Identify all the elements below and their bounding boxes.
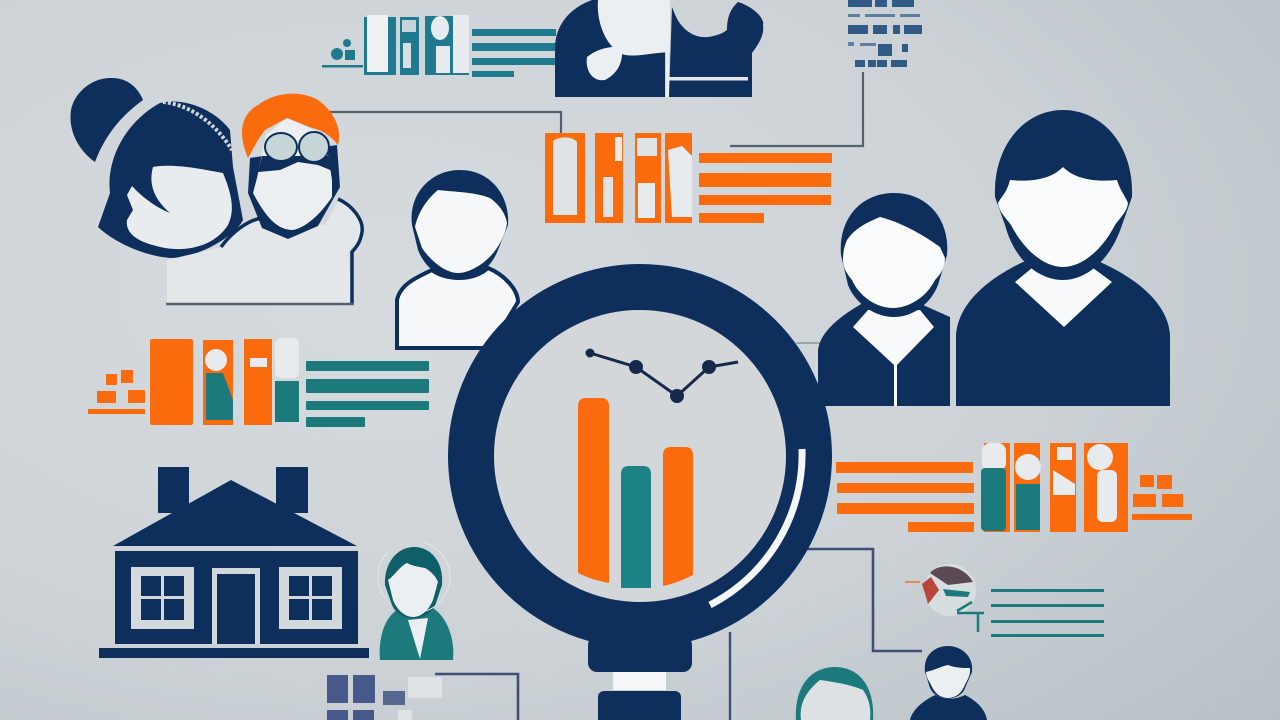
middle person collar	[853, 310, 934, 406]
middle person face	[843, 217, 945, 308]
handle collar	[588, 636, 692, 672]
glasses bridge	[258, 156, 336, 172]
icon: bottom person with teal hair	[796, 667, 873, 720]
glasses	[265, 132, 329, 162]
icon: magnifying glass	[471, 287, 809, 720]
roof	[113, 480, 357, 546]
lens highlight	[710, 449, 802, 605]
panel: orange and teal chart right	[836, 443, 1192, 532]
faces	[598, 0, 670, 56]
icon: bottom person navy	[910, 646, 987, 720]
icon: top couple	[555, 0, 763, 97]
panel: orange and teal chart left	[88, 338, 429, 427]
text bars	[472, 29, 556, 36]
body	[397, 268, 518, 348]
face	[926, 665, 970, 698]
large person body	[956, 262, 1170, 406]
hair lace edge	[163, 102, 232, 150]
friend body outline	[221, 199, 362, 303]
woman head and hair	[98, 102, 243, 258]
bar chart	[578, 398, 693, 588]
tall bars	[364, 17, 396, 75]
face	[415, 190, 507, 273]
woman face	[127, 166, 232, 249]
handle neck	[613, 672, 666, 690]
base	[99, 648, 369, 658]
hair	[412, 170, 508, 279]
body	[380, 608, 453, 660]
text bars	[699, 153, 832, 163]
friend bottom line	[166, 303, 354, 305]
mini blocks	[343, 39, 351, 47]
icon: house	[99, 467, 369, 658]
mini blocks	[1132, 475, 1192, 520]
connector lines	[328, 72, 922, 720]
icon: right-hand couple	[818, 110, 1170, 406]
panel: teal chart top	[322, 15, 556, 77]
large person hair	[995, 110, 1132, 280]
chimneys	[158, 467, 189, 513]
large person face	[998, 167, 1128, 267]
hair bun	[70, 78, 143, 162]
middle person body	[818, 303, 950, 406]
hair	[385, 547, 442, 618]
icon: teal person	[378, 541, 453, 660]
middle person hair	[841, 193, 947, 317]
walls	[115, 551, 358, 644]
chart: small pie with text lines	[905, 564, 1104, 637]
icon: center-left person	[397, 170, 518, 348]
body	[910, 695, 987, 720]
friend orange hair	[242, 94, 339, 158]
hair	[925, 646, 972, 698]
line chart	[586, 348, 738, 403]
mini blocks	[88, 370, 145, 414]
large person collar	[1015, 268, 1112, 327]
text block: small blurred caption top right	[848, 0, 922, 67]
panel: orange chart top	[545, 133, 832, 223]
face	[388, 563, 438, 617]
panel: blocks bottom-left	[327, 675, 442, 720]
friend face	[253, 118, 332, 230]
collar	[408, 618, 428, 659]
windows and door	[131, 567, 194, 629]
friend body	[167, 198, 362, 305]
icon: woman with bun and friend with glasses	[70, 78, 362, 305]
handle grip	[598, 691, 681, 720]
text bars	[306, 361, 429, 371]
friend hair side	[248, 145, 340, 239]
lens ring	[471, 287, 809, 625]
